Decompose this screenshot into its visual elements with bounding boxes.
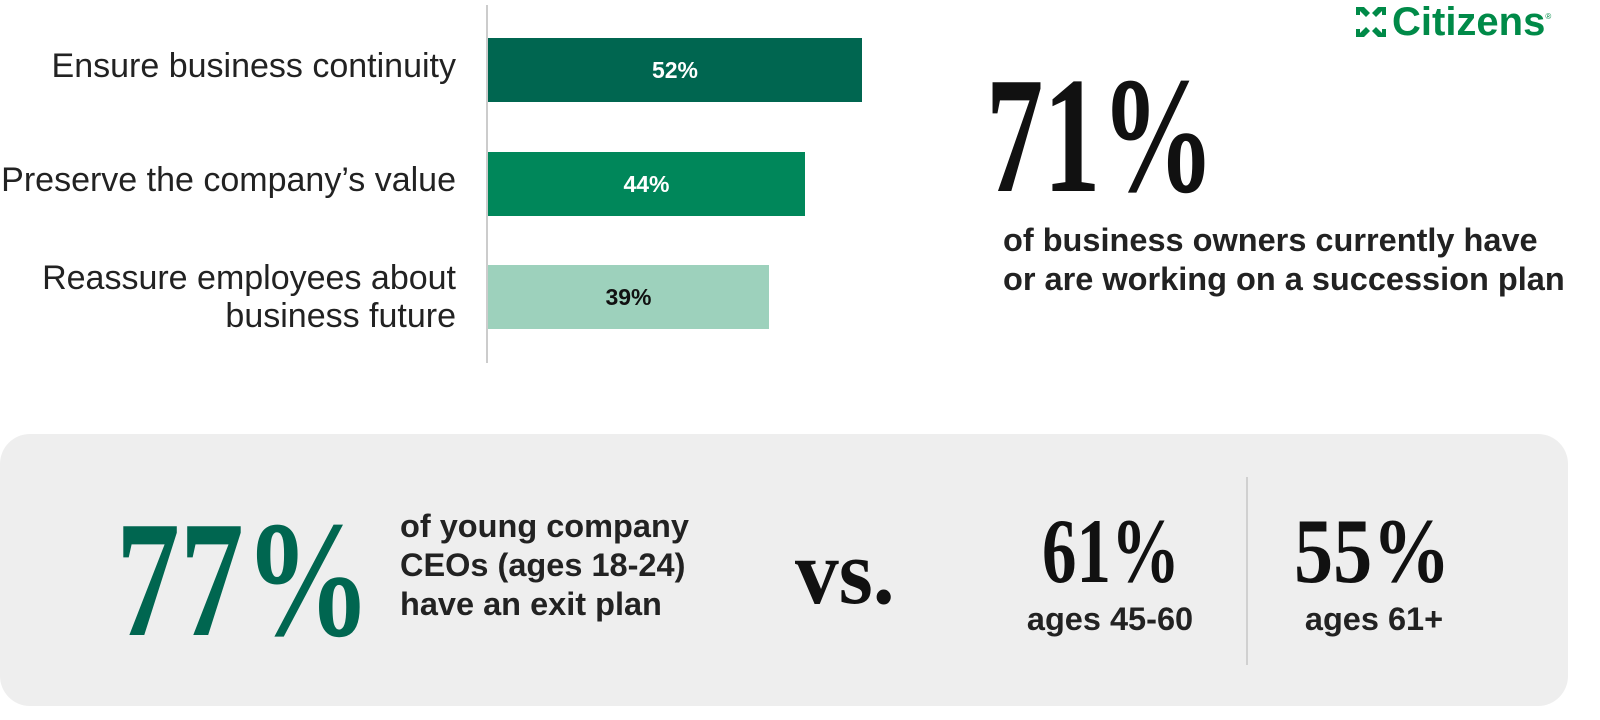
big stat: 71%: 71% xyxy=(986,43,1215,227)
bar: 52%: 52% xyxy=(652,56,698,82)
text: young CEOs xyxy=(400,508,689,622)
axis line xyxy=(486,5,488,363)
bar: 44% xyxy=(488,152,805,216)
logo: ® xyxy=(1545,12,1551,21)
text: young CEOs: CEOs (ages 18-24) xyxy=(400,547,685,583)
icon: logo mark xyxy=(1356,7,1386,37)
panel: age comparison xyxy=(0,434,1568,706)
logo: Citizens xyxy=(1392,0,1545,44)
label: continuity: Ensure business continuity xyxy=(52,47,456,85)
text: young CEOs: of young company xyxy=(400,508,689,544)
bar: 44%: 44% xyxy=(623,170,670,196)
text: 71% description: of business owners currently have xyxy=(1003,222,1538,258)
label: employees: business future xyxy=(225,297,456,335)
label: ages 45-60: ages 45-60 xyxy=(1027,601,1193,637)
text: 71% description: or are working on a succession plan xyxy=(1003,261,1565,297)
text: 71% description xyxy=(1003,222,1565,297)
text: vs.: vs. xyxy=(795,521,895,623)
label: ages 61+: ages 61+ xyxy=(1305,601,1443,637)
stat: 55%: 55% xyxy=(1294,500,1450,602)
bar: 52% xyxy=(488,38,862,102)
bar: 39%: 39% xyxy=(605,284,652,310)
text: young CEOs: have an exit plan xyxy=(400,586,662,622)
label: employees: Reassure employees about xyxy=(42,259,456,297)
stat: 61%: 61% xyxy=(1042,500,1180,602)
big stat: 77%: 77% xyxy=(116,487,372,671)
label: employees xyxy=(42,259,456,335)
label: value: Preserve the company’s value xyxy=(1,161,456,199)
bar: 39% xyxy=(488,265,769,329)
divider xyxy=(1246,477,1248,665)
